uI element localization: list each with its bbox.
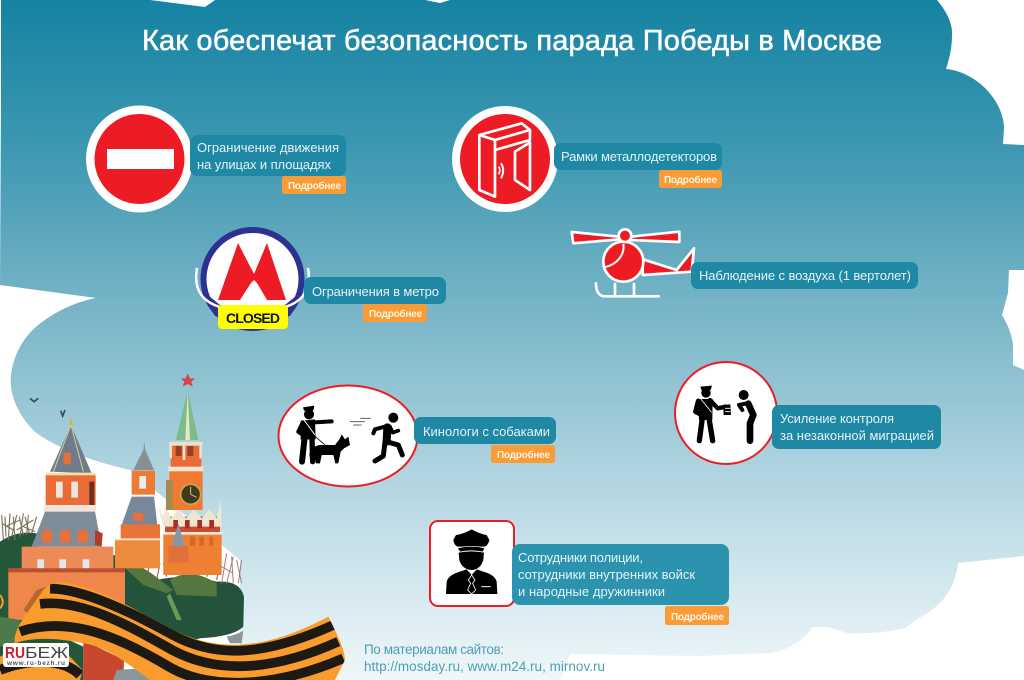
source note: http://mosday.ru, www.m24.ru, mirnov.ru xyxy=(364,659,605,674)
title: Как обеспечат безопасность парада Победы в Москве xyxy=(142,25,882,57)
button: more xyxy=(363,304,427,322)
item: migration control xyxy=(675,362,941,464)
button: more: Подробнее xyxy=(497,449,550,461)
label: migration control xyxy=(772,405,941,449)
icon: metal detector frame xyxy=(452,106,558,212)
source note: По материалам сайтов: xyxy=(364,642,504,657)
label: air observation: Наблюдение с воздуха (1 вертолет) xyxy=(699,268,911,283)
button: more xyxy=(665,606,729,625)
logo: RUБЕЖ xyxy=(3,643,69,667)
label: police xyxy=(512,544,729,605)
label: police: сотрудники внутренних войск xyxy=(518,567,695,582)
icon: helicopter xyxy=(572,229,694,296)
button: more xyxy=(491,445,555,463)
icon: closed metro xyxy=(196,230,309,329)
logo: RUБЕЖ: www.ru-bezh.ru xyxy=(6,660,65,667)
illustration: Kremlin with ribbon xyxy=(0,373,345,680)
birds xyxy=(30,398,65,416)
St George ribbon xyxy=(0,583,345,680)
button: more: Подробнее xyxy=(288,180,341,192)
lower wall xyxy=(0,617,157,680)
icon: officer checks documents xyxy=(675,362,777,464)
Left tower xyxy=(8,417,125,620)
button: more: Подробнее xyxy=(369,308,422,320)
button: more: Подробнее xyxy=(664,174,717,186)
label: metal detectors xyxy=(554,143,722,170)
item: helicopter xyxy=(572,229,918,296)
button: more: Подробнее xyxy=(671,611,724,623)
label: traffic restriction xyxy=(190,135,346,176)
label: dog handlers xyxy=(414,417,556,444)
label: metal detectors: Рамки металлодетекторов xyxy=(561,149,717,164)
item: metal detectors xyxy=(452,106,722,212)
item: police xyxy=(430,521,729,625)
item: dog handlers xyxy=(278,386,556,486)
label: migration control: Усиление контроля xyxy=(780,411,894,426)
item: traffic restriction xyxy=(86,106,346,212)
label: metro: Ограничения в метро xyxy=(312,284,439,299)
label: police: Сотрудники полиции, xyxy=(518,550,643,565)
label: migration control: за незаконной миграцией xyxy=(780,428,934,443)
Middle tower xyxy=(115,442,160,568)
icon: police officer xyxy=(430,521,514,606)
button: more xyxy=(282,176,346,194)
shrubs and hills xyxy=(0,513,244,680)
icon: dog handler chasing runner xyxy=(278,386,418,486)
icon: no entry sign xyxy=(86,106,193,212)
label: air observation xyxy=(691,262,918,289)
label: traffic restriction: Ограничение движения xyxy=(197,140,339,155)
item: metro xyxy=(196,230,446,329)
label: dog handlers: Кинологи с собаками xyxy=(423,424,550,439)
label: traffic restriction: на улицах и площадях xyxy=(197,157,332,172)
source note xyxy=(364,642,605,674)
button: more xyxy=(659,170,722,188)
icon: closed metro: CLOSED xyxy=(226,310,280,326)
logo: RUБЕЖ: RU xyxy=(5,645,25,662)
logo: RUБЕЖ: БЕЖ xyxy=(25,645,68,662)
label: police: и народные дружинники xyxy=(518,584,665,599)
Spasskaya tower xyxy=(158,373,223,575)
label: metro xyxy=(304,277,446,304)
